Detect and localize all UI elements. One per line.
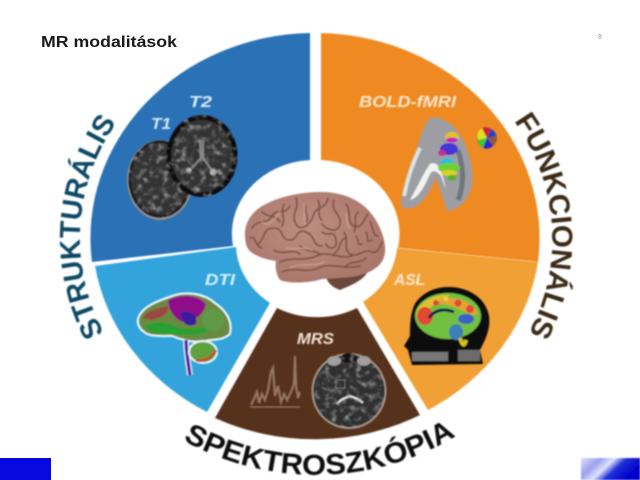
- image: ASL perfusion head: [404, 287, 489, 365]
- title: MR modalitások: [41, 34, 177, 51]
- page number mark: 8: [598, 34, 602, 41]
- panel: DTI sector: [95, 247, 270, 412]
- panel: ASL sector: [363, 248, 538, 410]
- label: MRS: MRS: [297, 331, 334, 348]
- cerebellum: [188, 340, 218, 364]
- label: T2: T2: [189, 94, 212, 111]
- colour wheel: [477, 127, 497, 149]
- image: T1 and T2 MRI slices: [127, 115, 238, 220]
- corner: blue gradient block right: [581, 458, 640, 480]
- panel: spectroscopy sector: [215, 308, 420, 439]
- activation clusters: [438, 132, 460, 181]
- image: DTI tractography brain: [138, 293, 231, 375]
- T2 slice: [166, 115, 238, 197]
- image: MRS axial slice: [312, 353, 386, 429]
- panel: structural sector: [90, 33, 310, 262]
- T1 slice: [127, 140, 193, 220]
- gyri: [250, 198, 382, 272]
- label: T1: T1: [151, 116, 171, 133]
- label: BOLD-fMRI: BOLD-fMRI: [359, 94, 457, 111]
- panel: functional sector: [321, 33, 540, 262]
- image: central brain: [245, 192, 385, 290]
- heading: STRUKTURÁLIS: STRUKTURÁLIS: [58, 114, 115, 340]
- image: BOLD-fMRI brain: [401, 118, 497, 211]
- image: MR spectrum chart: [250, 356, 300, 407]
- label: ASL: ASL: [393, 272, 425, 289]
- corner: blue block left: [0, 458, 51, 480]
- label: DTI: DTI: [205, 272, 236, 289]
- heading: FUNKCIONÁLIS: FUNKCIONÁLIS: [514, 110, 574, 340]
- heading: SPEKTROSZKÓPIA: SPEKTROSZKÓPIA: [184, 422, 456, 476]
